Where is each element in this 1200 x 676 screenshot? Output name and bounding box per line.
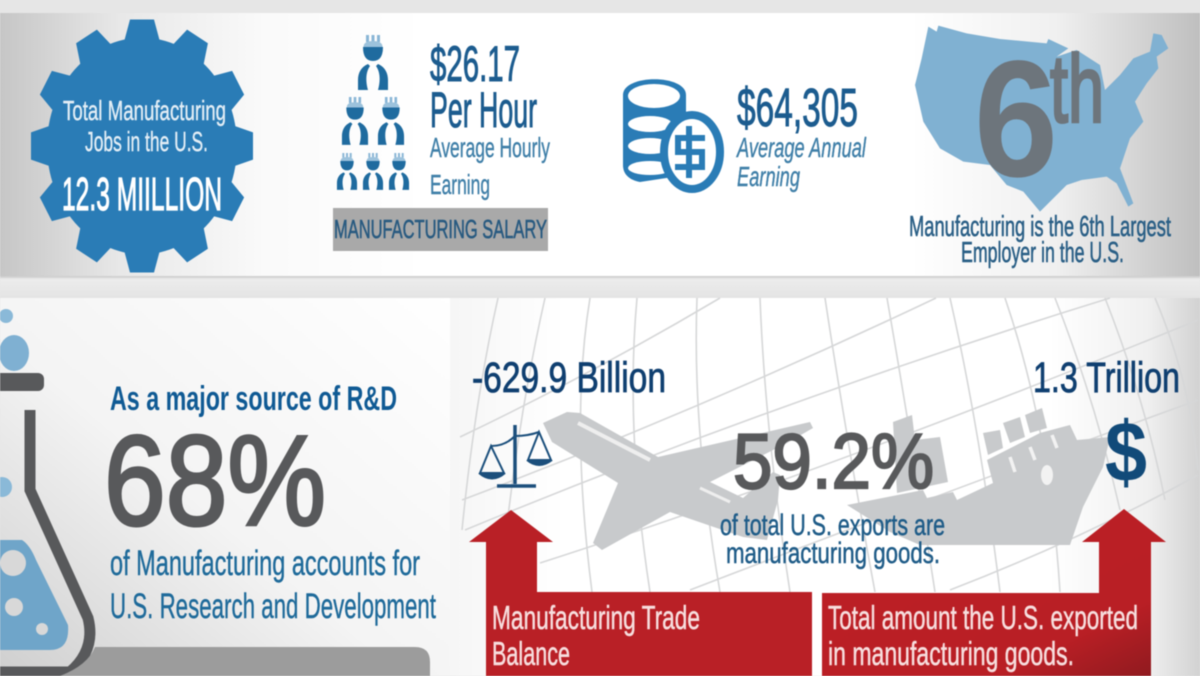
text: balance: Balance: [492, 635, 570, 672]
text: in manufacturing goods: in manufacturing goods.: [828, 635, 1074, 672]
text: major source of R&D: As a major source of R&D: [110, 380, 397, 418]
text: trade balance value: -629.9 Billion: [472, 354, 666, 402]
icon: flask: [0, 309, 430, 676]
panel: exports: [450, 298, 1200, 676]
text: manufacturing trade: Manufacturing Trade: [492, 599, 700, 636]
text: accounts line 2: U.S. Research and Development: [110, 587, 436, 626]
icon: cargo ship: [847, 408, 1110, 545]
arrow: trade balance: [469, 510, 812, 676]
text: th: th: [1050, 36, 1104, 143]
text: exports line 2: manufacturing goods.: [726, 537, 940, 570]
text: hourly wage: $26.17: [430, 36, 520, 92]
panel: top statistics: [0, 13, 1200, 276]
icon: workers pyramid: [337, 35, 409, 190]
text: 68 percent: 68%: [104, 410, 326, 553]
top background band: [0, 0, 1200, 13]
label: manufacturing salary: MANUFACTURING SALARY: [334, 214, 547, 244]
text: average hourly: Average Hourly: [430, 132, 550, 163]
text: 6: 6: [974, 27, 1058, 212]
text: earning annual: Earning: [737, 161, 800, 192]
icon: airplane: [543, 412, 813, 550]
panel: research and development: [0, 298, 450, 676]
text: exports line 1: of total U.S. exports are: [720, 509, 945, 542]
text: annual earning value: $64,305: [737, 78, 858, 138]
text: earning: Earning: [430, 169, 490, 200]
text: jobs in the U.S.: Jobs in the U.S.: [85, 126, 208, 157]
panel: total jobs gear: [31, 19, 253, 273]
map: United States: [915, 26, 1168, 212]
text: total manufacturing jobs: Total Manufacturing: [63, 95, 226, 126]
icon: dollar sign: $: [1105, 405, 1147, 500]
icon: balance scales: [479, 425, 552, 486]
middle divider band: [0, 276, 1200, 298]
text: average annual: Average Annual: [736, 132, 867, 163]
arrow: total exported: [822, 509, 1166, 676]
text: accounts line 1: of Manufacturing accounts for: [110, 544, 420, 583]
label: manufacturing salary: [333, 208, 548, 251]
text: per hour: Per Hour: [430, 82, 537, 138]
icon: coin stack with dollar: [623, 79, 720, 189]
icon: gear: [31, 19, 253, 273]
text: 12.3 million: 12.3 MIILLION: [62, 168, 222, 220]
globe grid: [460, 298, 1198, 592]
text: 59.2 percent: 59.2%: [733, 417, 934, 505]
